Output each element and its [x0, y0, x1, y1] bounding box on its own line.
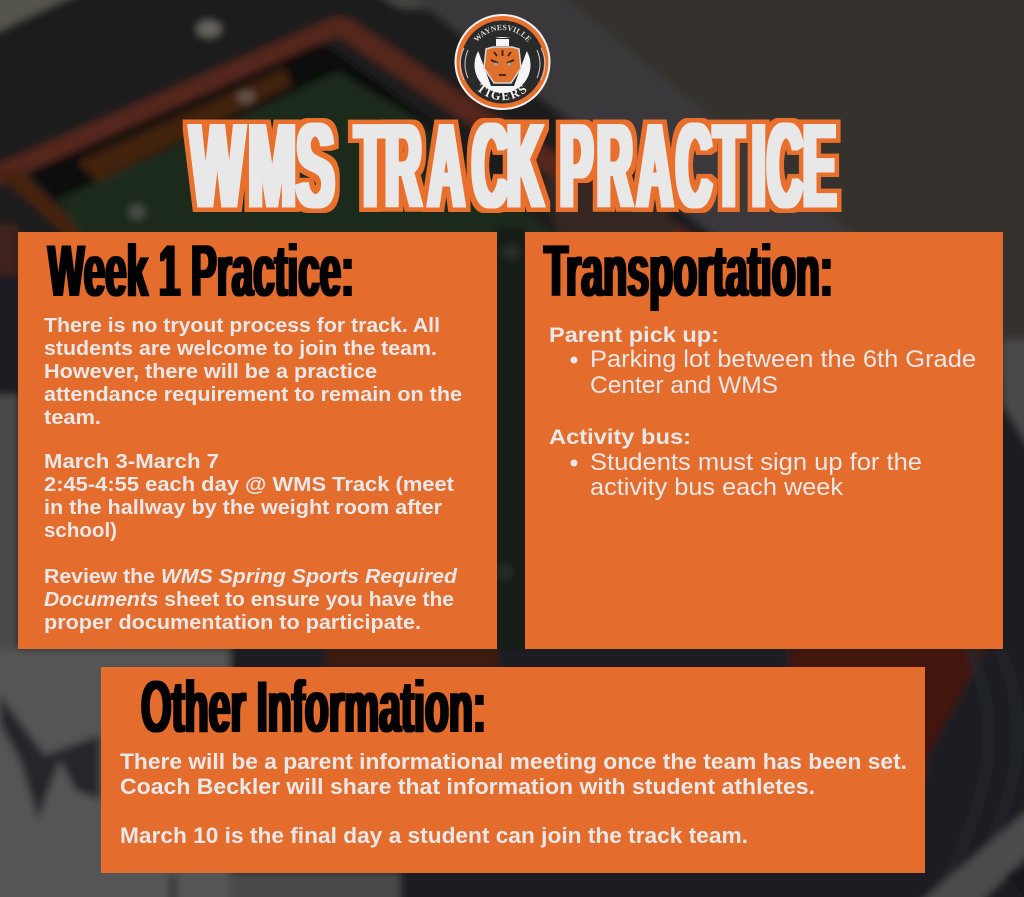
- text block: parent meeting and deadline: [120, 749, 907, 848]
- text block: tryout and schedule: school): [44, 519, 117, 542]
- heading: other information: Other Information:: [141, 667, 486, 748]
- text block: tryout and schedule: 2:45-4:55 each day @ WMS Track (meet: [44, 473, 454, 496]
- text block: parent meeting and deadline: March 10 is the final day a student can join the track team.: [120, 823, 748, 848]
- panel: week 1 practice: [18, 231, 497, 649]
- text block: tryout and schedule: [44, 314, 462, 634]
- text block: tryout and schedule: attendance requirement to remain on the: [44, 383, 462, 406]
- text block: activity bus: Students must sign up for the: [590, 449, 922, 476]
- title: TRACK: [355, 99, 543, 233]
- heading: week 1 practice: Week 1 Practice:: [48, 231, 354, 312]
- logo: Waynesville Tigers badge: [454, 14, 550, 110]
- text block: tryout and schedule: March 3-March 7: [44, 450, 219, 473]
- text block: parent meeting and deadline: Coach Beckler will share that information with student athletes.: [120, 774, 815, 799]
- title: WMS: [190, 99, 335, 232]
- text block: parent pick up: [549, 323, 976, 399]
- text block: tryout and schedule: team.: [44, 406, 101, 429]
- logo text: TIGERS: TIGERS: [478, 83, 526, 100]
- text block: tryout and schedule: Review the WMS Spring Sports Required: [44, 565, 457, 588]
- text block: tryout and schedule: There is no tryout process for track. All: [44, 314, 440, 337]
- text block: parent meeting and deadline: There will be a parent informational meeting once the team has been set.: [120, 749, 907, 774]
- logo text: WAYNESVILLE: WAYNESVILLE: [473, 24, 532, 42]
- text block: parent pick up: Parking lot between the 6th Grade: [590, 346, 976, 373]
- text block: tryout and schedule: Documents sheet to ensure you have the: [44, 588, 454, 611]
- text block: parent pick up: Parent pick up:: [549, 323, 719, 347]
- panel: other information: [101, 667, 925, 873]
- text block: parent pick up: Center and WMS: [590, 372, 778, 399]
- text block: tryout and schedule: students are welcome to join the team.: [44, 337, 437, 360]
- text block: activity bus: Activity bus:: [549, 425, 691, 449]
- icon: tiger face: [484, 47, 521, 83]
- title: [190, 99, 836, 233]
- text block: tryout and schedule: However, there will be a practice: [44, 360, 377, 383]
- text block: activity bus: [549, 425, 922, 501]
- panel: transportation: [525, 231, 1003, 649]
- text block: tryout and schedule: in the hallway by the weight room after: [44, 496, 442, 519]
- text block: activity bus: activity bus each week: [590, 474, 844, 501]
- title: PRACTICE: [560, 100, 836, 233]
- text block: tryout and schedule: proper documentation to participate.: [44, 611, 421, 634]
